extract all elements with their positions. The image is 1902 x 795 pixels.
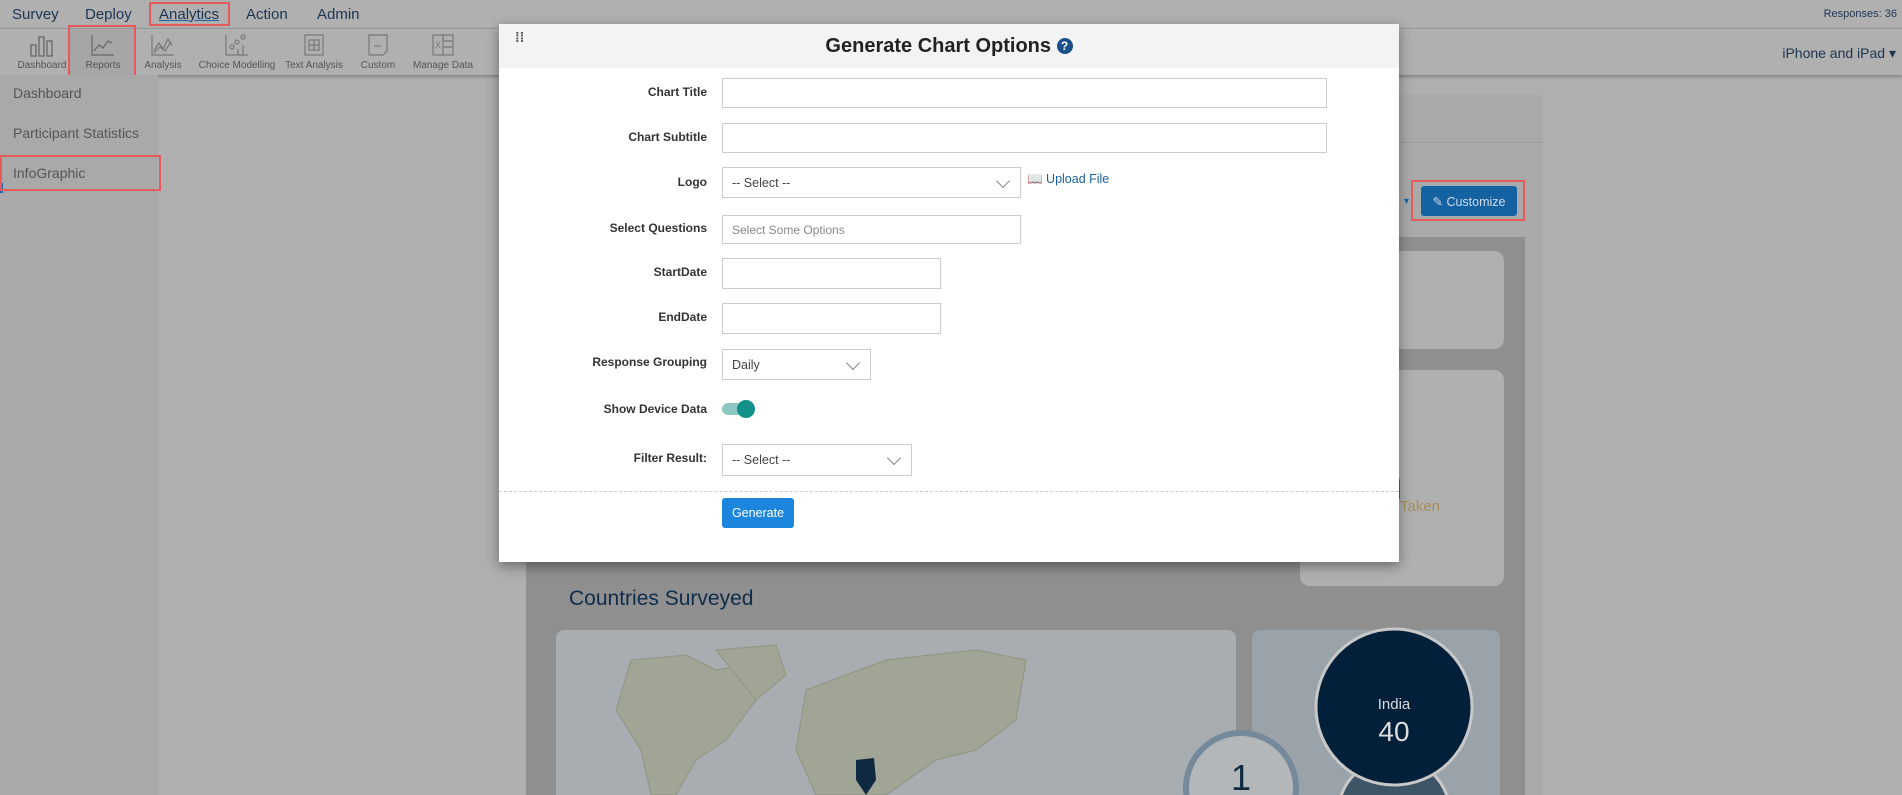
form labels: Chart Subtitle (628, 130, 707, 144)
customize button (1421, 186, 1517, 216)
toolbar icons: Custom (361, 60, 395, 71)
sidebar: InfoGraphic (13, 165, 85, 181)
form labels: Logo (678, 175, 707, 189)
countries card with bubbles (1183, 628, 1500, 795)
text: Select Some Options (732, 222, 845, 236)
modal: Generate Chart Options (499, 24, 1399, 562)
form labels: Select Questions (610, 221, 707, 235)
bubble: 1 country (1186, 733, 1296, 795)
form labels: StartDate (654, 265, 707, 279)
generate button (722, 498, 794, 528)
text: Daily (732, 358, 760, 372)
dashed divider (499, 491, 1399, 492)
toggle (722, 403, 752, 415)
map card (556, 630, 1236, 795)
toolbar icons: Dashboard (18, 60, 66, 71)
text: 📖 Upload File (1027, 172, 1109, 186)
form labels: Response Grouping (592, 355, 707, 369)
form labels: Chart Title (648, 85, 707, 99)
text: -- Select -- (732, 453, 790, 467)
modal header: ⁞⁞ (515, 29, 524, 45)
bubble: secondary (1338, 758, 1450, 795)
toolbar icons: Analysis (144, 60, 182, 71)
form labels: EndDate (658, 310, 707, 324)
form labels: Filter Result: (634, 451, 707, 465)
bubble: India 40 (1316, 629, 1472, 785)
toolbar icons: Reports (85, 60, 121, 71)
top nav bar: Responses: 36 (1824, 8, 1897, 20)
bubble: India 40: 40 (1378, 716, 1410, 747)
top nav bar: Survey (12, 6, 59, 23)
top nav bar: Deploy (85, 6, 132, 23)
sidebar: Participant Statistics (13, 125, 139, 141)
toolbar icons: Manage Data (413, 60, 473, 71)
red highlight: Analytics (149, 2, 230, 26)
top nav bar: Action (246, 6, 288, 23)
toolbar (0, 29, 1902, 75)
toolbar icons: Text Analysis (285, 60, 343, 71)
modal header: ? (1061, 39, 1068, 53)
stat cards (1300, 251, 1504, 349)
heading: Countries Surveyed: Countries Surveyed (569, 587, 753, 610)
top nav bar (0, 0, 1902, 29)
text: Taken (1400, 498, 1440, 515)
generate button: Generate (732, 506, 784, 520)
top nav bar: Analytics (159, 6, 219, 23)
customize button: ✎ Customize (1432, 194, 1506, 208)
modal header: Generate Chart Options (825, 35, 1051, 57)
red highlight: InfoGraphic (0, 155, 161, 191)
toolbar icons (18, 34, 474, 71)
red highlight: Customize (1411, 180, 1525, 221)
text: ▾ (1404, 196, 1409, 207)
text: -- Select -- (732, 176, 790, 190)
form labels: Show Device Data (604, 402, 707, 416)
toolbar icons: X (435, 40, 441, 50)
sidebar (0, 75, 158, 795)
form inputs (722, 78, 1327, 108)
text: n (1376, 457, 1403, 510)
device selector: iPhone and iPad ▾ (1782, 45, 1896, 61)
modal header (499, 24, 1399, 68)
bubble: India 40: India (1378, 696, 1411, 713)
red highlight: Reports (68, 25, 136, 79)
top nav bar: Admin (317, 6, 360, 23)
form labels (592, 85, 708, 465)
sidebar: Dashboard (13, 85, 82, 101)
content panel (526, 95, 1543, 795)
toolbar icons: Choice Modelling (199, 60, 275, 71)
